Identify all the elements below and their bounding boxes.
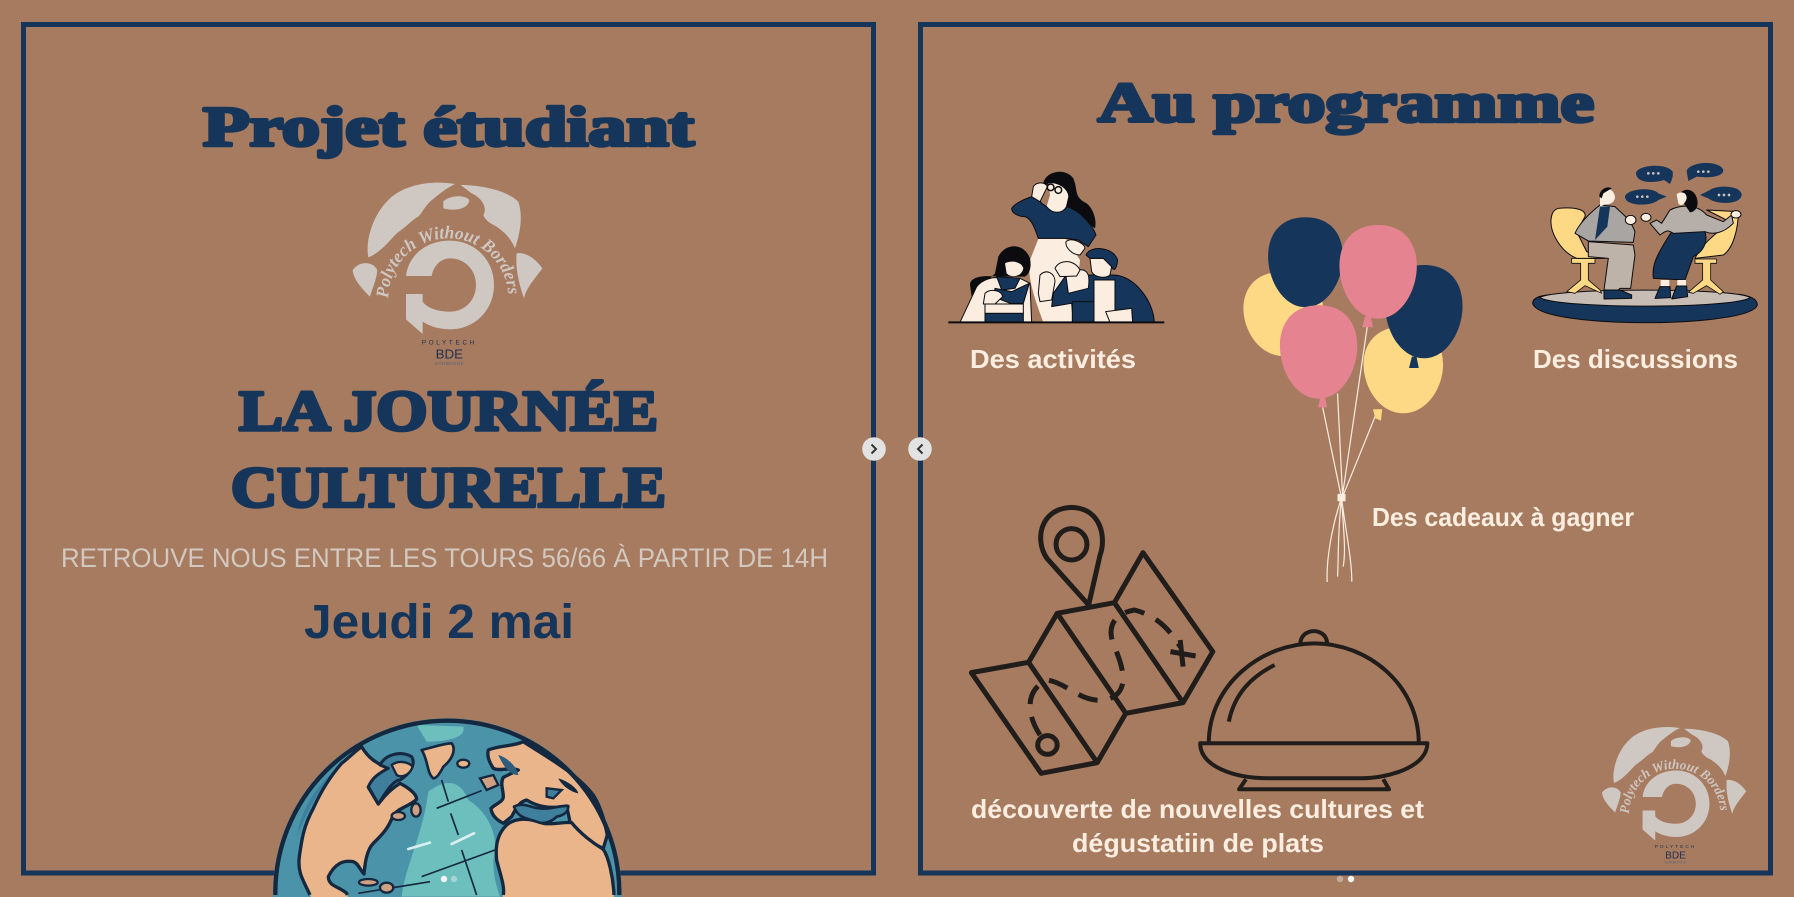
left chair base: [1567, 258, 1602, 293]
seated girl hair: [970, 246, 1031, 297]
North America outline: [299, 747, 417, 895]
icon: food cloche: [1200, 631, 1427, 789]
knot: [1338, 494, 1346, 501]
label: Des discussions: Des discussions: [1533, 344, 1738, 374]
knob: [1300, 631, 1327, 644]
man head: [1600, 189, 1615, 207]
woman trousers: [1653, 232, 1706, 280]
puzzle pieces: [1094, 280, 1115, 322]
label: découverte et dégustation: dégustatiin de plats: [1072, 828, 1324, 858]
pink balloon low: [1280, 305, 1357, 407]
heading: La journée culturelle: CULTURELLE: [231, 456, 666, 520]
heading: Projet étudiant: Projet étudiant: [203, 96, 694, 158]
label: Des activités: Des activités: [970, 344, 1136, 374]
Caspian inlet: [558, 778, 578, 793]
panel: right frame: [920, 24, 1770, 873]
right chair: [1695, 210, 1738, 258]
polar highlight: [417, 725, 464, 742]
Hudson bay: [368, 754, 413, 804]
text: location and time: RETROUVE NOUS ENTRE LES TOURS 56/66 À PARTIR DE 14H: [61, 543, 828, 573]
logo caption: BDE: [1665, 851, 1686, 862]
woman top: [1012, 195, 1096, 247]
logo: Polytech Without Borders (right): [1602, 727, 1746, 865]
man trousers: [1588, 242, 1635, 290]
yellow balloon right: [1364, 327, 1443, 421]
North America fill: [299, 747, 417, 897]
logo arc text: Polytech Without Borders: [376, 226, 516, 298]
woman hair: [1678, 190, 1698, 212]
Africa fill: [496, 819, 614, 897]
icon: discussion on stage: [1533, 163, 1757, 323]
stage: [1533, 294, 1757, 323]
Scandinavia inlet: [498, 755, 518, 775]
logo caption: SORBONNE: [435, 361, 464, 366]
icon: globe: [273, 718, 622, 897]
British isles: [480, 775, 498, 790]
speech bubbles: [1625, 163, 1742, 205]
raised hand: [1032, 183, 1047, 202]
woman hands: [1641, 213, 1651, 221]
man shirt: [1595, 207, 1610, 240]
right chair base: [1688, 259, 1723, 294]
location pin: [1041, 507, 1102, 605]
highlight: [1229, 665, 1275, 722]
woman face: [1677, 192, 1687, 205]
ground line: [948, 321, 1164, 323]
logo arc text: Polytech Without Borders: [1620, 759, 1726, 814]
neck and face: [1047, 183, 1068, 212]
western ocean shade: [297, 765, 342, 837]
arrow: next: [862, 437, 886, 461]
hand on hip: [1066, 240, 1085, 255]
man shoes: [1604, 290, 1632, 299]
folded map: [971, 553, 1213, 773]
icon: people with puzzle: [948, 172, 1164, 322]
globe rim: [275, 721, 619, 895]
logo caption: POLYTECH: [422, 339, 477, 346]
boy hair: [1086, 249, 1118, 269]
label: découverte et dégustation: découverte de nouvelles cultures et: [971, 794, 1424, 824]
logo P mark: [406, 241, 494, 334]
logo world map: [353, 183, 542, 298]
pink balloon top: [1339, 225, 1417, 327]
seated girl body: [960, 278, 1032, 322]
logo caption: POLYTECH: [1655, 844, 1696, 850]
boy face: [1090, 258, 1112, 277]
map cross: [1170, 640, 1196, 667]
logo caption: SORBONNE: [1664, 861, 1687, 865]
icon: balloons: [1243, 217, 1463, 582]
woman ankles: [1661, 280, 1686, 287]
navy balloon left: [1268, 217, 1343, 307]
Black sea: [547, 788, 562, 798]
navy balloon right: [1385, 265, 1463, 368]
boy jacket: [1052, 275, 1154, 322]
carousel dots: left: [441, 876, 457, 882]
Greenland: [422, 743, 454, 778]
label: Des cadeaux à gagner: Des cadeaux à gagner: [1372, 502, 1634, 532]
islands: [359, 803, 421, 893]
icon: map with pin: [971, 507, 1213, 773]
woman top: [1650, 206, 1733, 235]
foot: [1239, 779, 1389, 789]
logo P mark: [1643, 770, 1709, 840]
yellow balloon left: [1243, 272, 1323, 356]
logo caption: BDE: [436, 346, 463, 361]
girl hand: [983, 290, 1003, 304]
standing woman hair: [1043, 172, 1096, 228]
woman lower hand: [1038, 272, 1055, 302]
arctic islands: [392, 762, 413, 776]
meridians: [358, 780, 495, 895]
ocean highlight: [402, 783, 500, 897]
panel: left frame: [24, 24, 874, 873]
plate: [1200, 743, 1427, 778]
label: découverte et dégustation: [971, 794, 1424, 858]
strings: [1323, 327, 1376, 582]
girl face: [1005, 262, 1023, 276]
text: date: Jeudi 2 mai: [304, 596, 574, 649]
vest and open book: [993, 277, 1029, 303]
books: [985, 304, 1023, 313]
dome: [1209, 643, 1419, 743]
Eurasia: [488, 742, 607, 848]
logo world map: [1602, 727, 1746, 814]
logo: Polytech Without Borders (left): [352, 182, 542, 366]
logo caption: [422, 339, 477, 366]
left chair: [1551, 208, 1605, 258]
highlights: [408, 833, 474, 849]
ocean: [273, 718, 622, 897]
Africa outline: [496, 819, 614, 895]
heading: Au programme: Au programme: [1098, 72, 1594, 134]
arrow: previous: [908, 437, 932, 461]
map start point: [1038, 736, 1057, 754]
man jacket: [1575, 205, 1635, 242]
man hand: [1625, 215, 1636, 225]
woman shoes: [1655, 286, 1688, 299]
dashed route: [1030, 610, 1180, 735]
heading: La journée culturelle: LA JOURNÉE: [239, 380, 658, 443]
logo caption: [1655, 844, 1696, 865]
Mediterranean: [514, 805, 568, 823]
skirt: [1029, 239, 1080, 322]
Iceland: [457, 760, 469, 768]
glasses: [1047, 184, 1062, 193]
boy hands: [1055, 262, 1080, 277]
heading: La journée culturelle: [231, 380, 666, 520]
bubble dots: [1636, 170, 1730, 198]
carousel dots: right: [1337, 876, 1354, 882]
